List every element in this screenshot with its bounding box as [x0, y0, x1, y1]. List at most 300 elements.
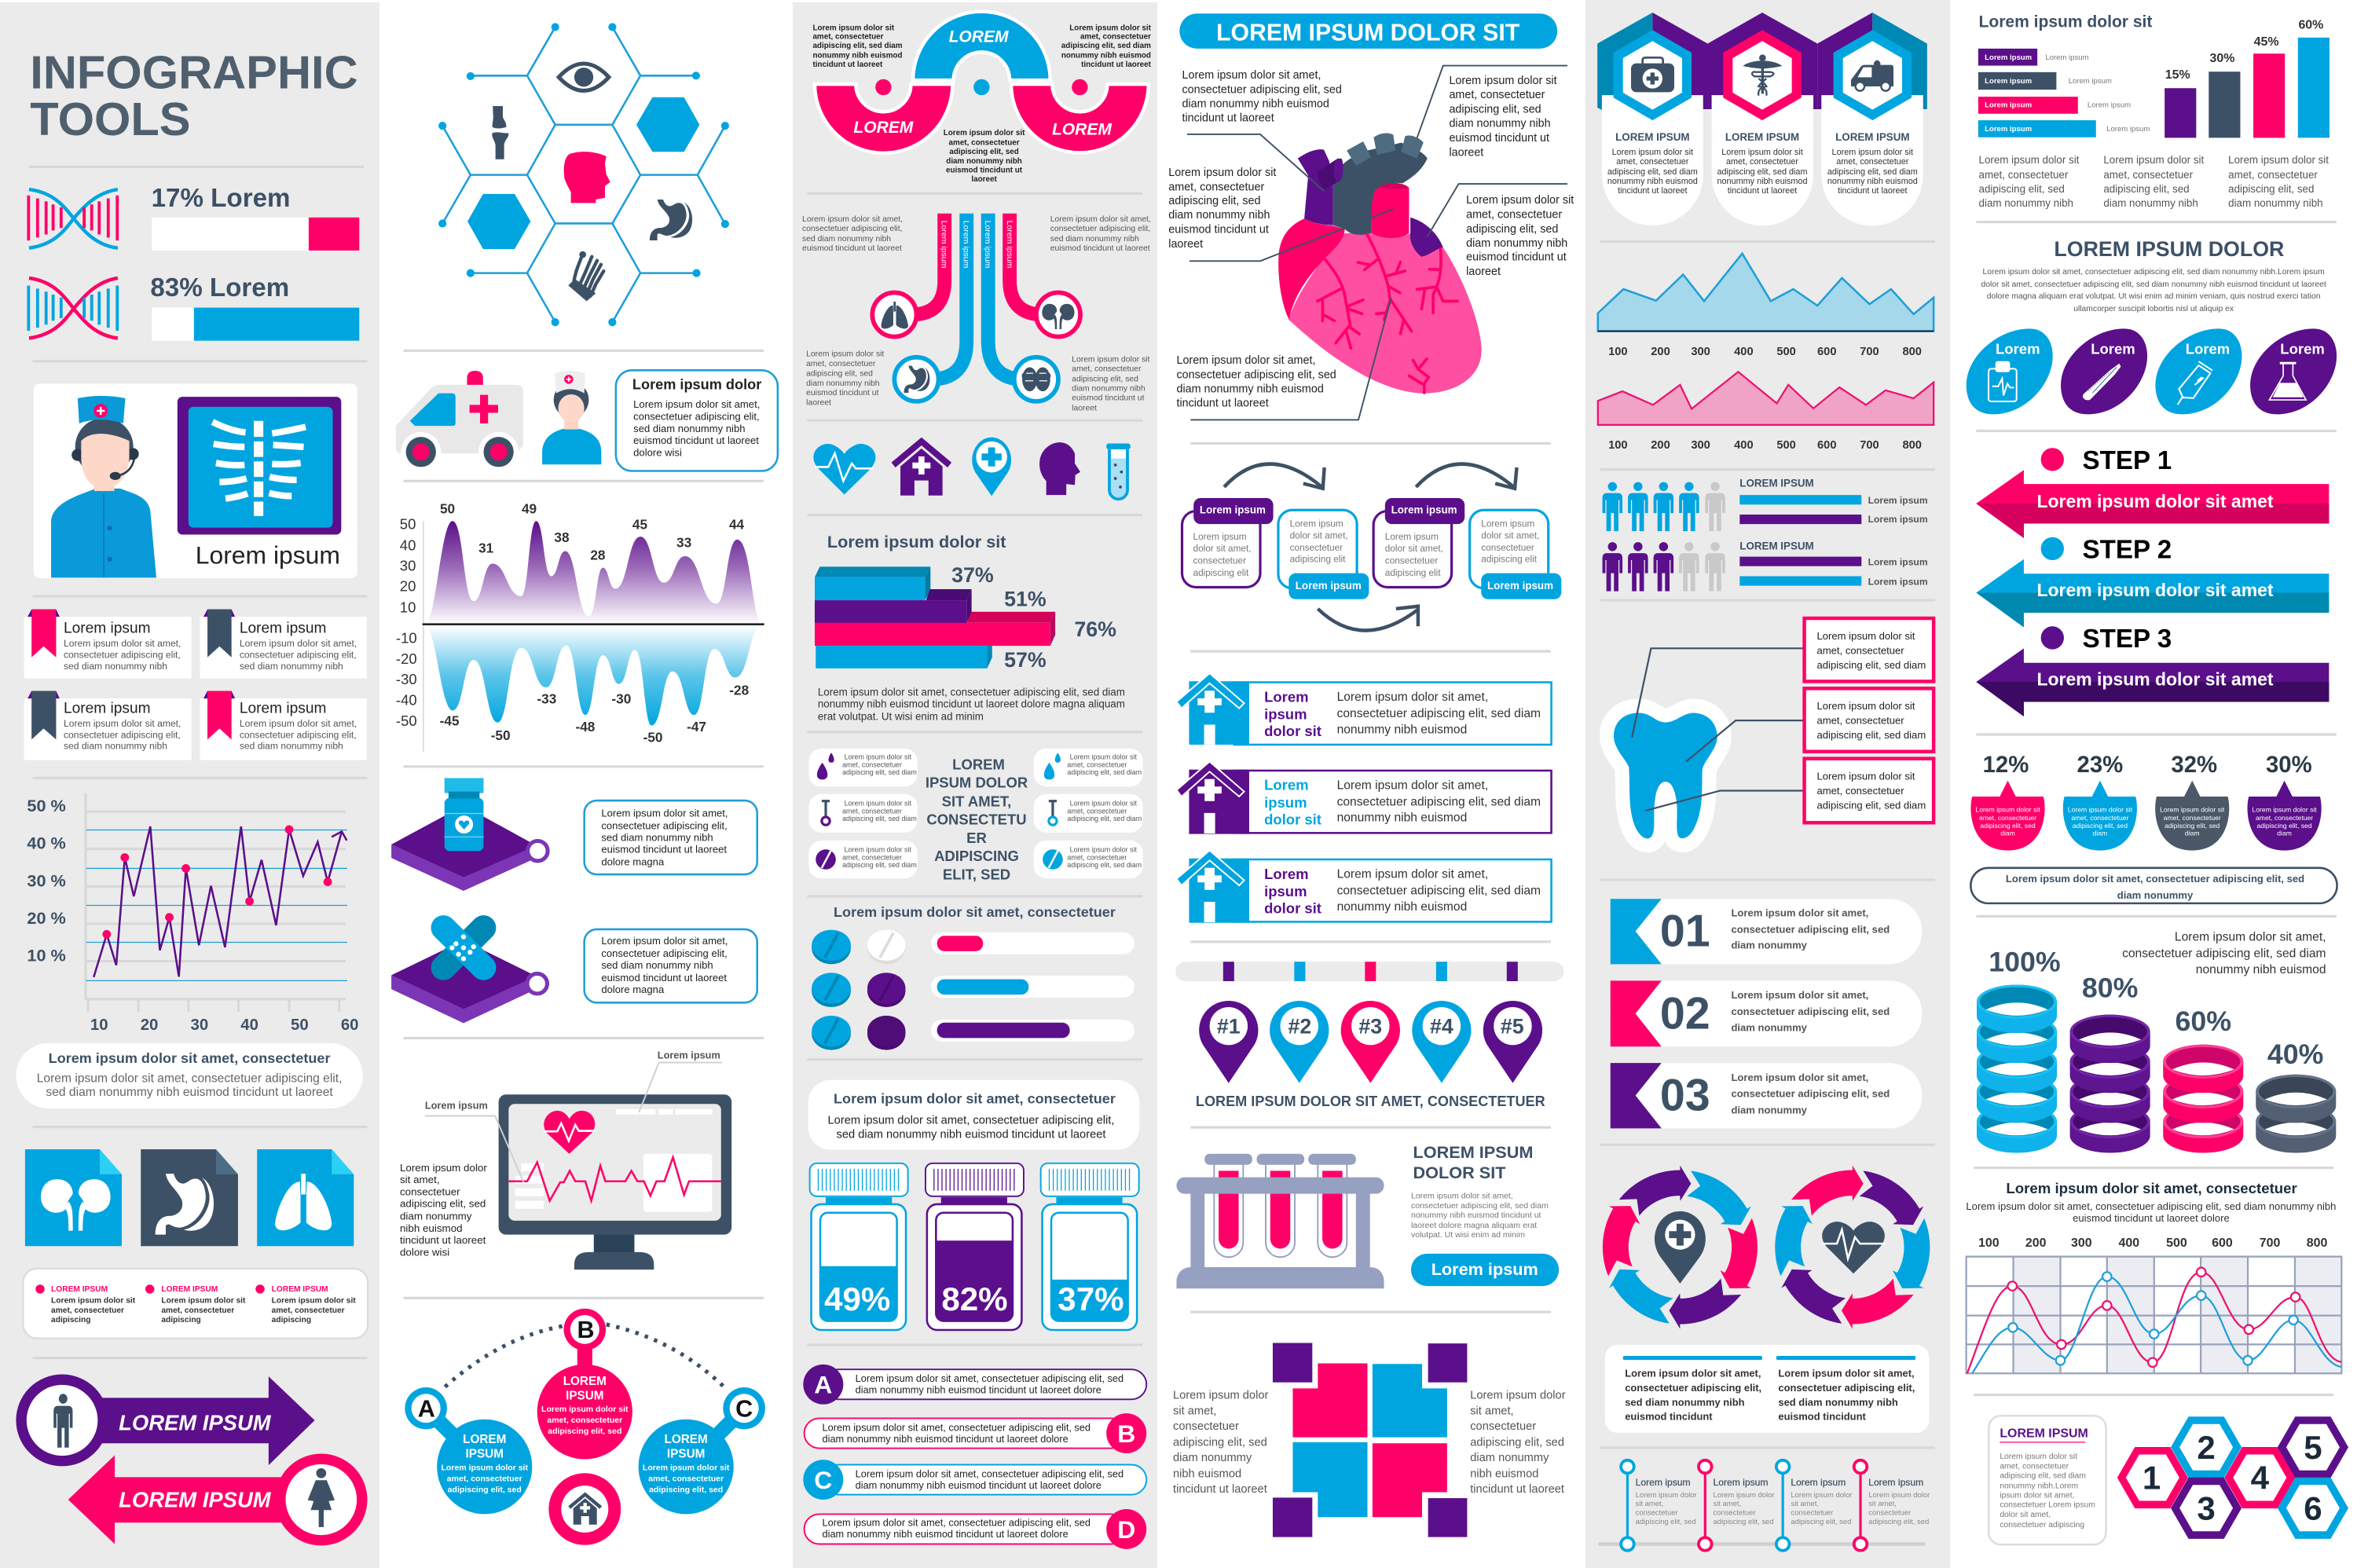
chart: mirrored area chart: 33 [676, 534, 691, 550]
chart: pink area: 500 [1776, 439, 1796, 452]
bar list and column chart: Lorem ipsum [2088, 101, 2131, 109]
chart: mirrored area chart: 10 [400, 599, 416, 615]
panel: column 5 background [1585, 0, 1950, 1568]
icon: paramedic [542, 371, 601, 464]
heart anatomy diagram: consectetuer adipiscing elit, sed [1182, 84, 1342, 97]
ribbon card 2: Lorem ipsum [240, 621, 326, 637]
white card with two text columns [1605, 1345, 1929, 1433]
numbered list 03: Lorem ipsum dolor sit amet, [1731, 1072, 1868, 1083]
chart: mirrored area chart: 31 [478, 540, 494, 555]
heart anatomy diagram: diam nonummy nibh euismod [1182, 97, 1329, 110]
puzzle squares diagram: Lorem ipsum dolor [1470, 1390, 1566, 1402]
ribbon card 3: Lorem ipsum [64, 701, 151, 717]
heart anatomy diagram: euismod tincidunt ut [1168, 224, 1269, 236]
diagram: A B C circles: amet, consectetuer [447, 1474, 522, 1483]
drop and pill pills with central heading: Lorem ipsum dolor sit [1070, 845, 1137, 853]
timeline with four items: sit amet, [1636, 1499, 1663, 1508]
drop and pill pills with central heading: adipiscing elit, sed diam [842, 768, 917, 776]
drop and pill pills with central heading: adipiscing elit, sed diam [1067, 861, 1142, 869]
drop and pill pills with central heading: amet, consectetuer [1067, 808, 1127, 815]
U-shaped three part diagram: Lorem ipsum dolor sit [812, 24, 895, 32]
white card with two text columns: consectetuer adipiscing elit, [1625, 1382, 1761, 1394]
numbered hexagons: 6 [2304, 1489, 2322, 1526]
text card: Lorem ipsum: consectetuer Lorem ipsum [2000, 1501, 2095, 1509]
puzzle squares diagram: sit amet, [1470, 1405, 1514, 1417]
numbered list 03 [1611, 1063, 1922, 1128]
diagram: A B C circles: amet, consectetuer [547, 1416, 622, 1425]
organ pipes diagram: amet, consectetuer [806, 360, 876, 368]
header pill: LOREM IPSUM DOLOR SIT [1216, 20, 1520, 46]
leaf shaped medical icons [1967, 328, 2337, 414]
chart: mirrored area chart: -45 [440, 713, 460, 729]
drop and pill pills with central heading: CONSECTETU [926, 811, 1027, 828]
hexagon badge cards: adipiscing elit, sed diam [1607, 167, 1698, 177]
chart: mirrored area chart: -10 [396, 629, 417, 646]
diagram: A B C circles: Lorem ipsum dolor sit [643, 1464, 730, 1472]
list item A: Lorem ipsum dolor sit amet, consectetuer adipiscing elit, sed [856, 1372, 1124, 1384]
icon: foot bones [568, 251, 603, 301]
text: monitor paragraph: tincidunt ut laoreet [400, 1234, 486, 1246]
bar list and column chart: Lorem ipsum [1985, 125, 2032, 134]
white card with two text columns: euismod tincidunt [1625, 1410, 1713, 1422]
list item C: Lorem ipsum dolor sit amet, consectetuer adipiscing elit, sed [856, 1467, 1124, 1479]
numbered list 03: diam nonummy [1731, 1104, 1808, 1116]
ribbon card 4: sed diam nonummy nibh [240, 741, 343, 752]
chart: blue area: 300 [1691, 346, 1710, 358]
location pins row: #4 [1430, 1015, 1453, 1039]
DNA statistic 83% [28, 273, 359, 341]
U-shaped three part diagram: euismod tincidunt ut [946, 166, 1023, 174]
drop and pill pills with central heading: amet, consectetuer [842, 761, 902, 768]
step 3 arrow [1976, 625, 2329, 716]
house banner 2: consectetuer adipiscing elit, sed diam [1337, 795, 1541, 808]
hexagon badge cards: nonummy nibh euismod [1607, 177, 1698, 186]
house banner 3 [1176, 851, 1552, 923]
drop and pill pills with central heading: ER [966, 830, 987, 846]
house banner 1: dolor sit [1264, 723, 1321, 739]
house banner 3: nonummy nibh euismod [1337, 900, 1467, 914]
chart: two-line grid chart: 200 [2025, 1236, 2047, 1250]
text box: Lorem ipsum dolor: dolore wisi [633, 446, 682, 458]
chart: blue area: 200 [1651, 346, 1670, 358]
chart: blue area: 600 [1817, 346, 1837, 358]
label: 83% Lorem: 83% Lorem [150, 273, 289, 302]
tooth diagram: adipiscing elit, sed diam [1817, 799, 1926, 811]
bar list and column chart: diam nonummy nibh [1979, 197, 2073, 209]
timeline with four items: adipiscing elit, sed [1791, 1517, 1851, 1526]
timeline with four items: Lorem ipsum [1791, 1477, 1846, 1488]
text card: Lorem ipsum [1989, 1416, 2106, 1544]
text box: bandage: consectetuer adipiscing elit, [601, 947, 728, 959]
organ pipes diagram: amet, consectetuer [1072, 365, 1142, 374]
bottle 82%: 82% [941, 1280, 1008, 1317]
leaf shaped medical icons: Lorem [1996, 340, 2040, 357]
text: test tube section: LOREM IPSUM [1413, 1142, 1533, 1162]
leaf shaped medical icons: Lorem [2280, 340, 2325, 357]
heart anatomy diagram: amet, consectetuer [1466, 208, 1562, 221]
white card with two text columns: euismod tincidunt [1778, 1410, 1866, 1422]
bar list and column chart: amet, consectetuer [1979, 169, 2069, 181]
chart: pink area: 100 [1608, 439, 1628, 452]
house banner 3: ipsum [1264, 883, 1307, 899]
icon: ambulance [396, 371, 523, 472]
text: monitor paragraph: nibh euismod [400, 1222, 463, 1234]
people pictogram statistics: Lorem ipsum [1868, 514, 1928, 525]
U-shaped three part diagram: tincidunt ut laoreet [812, 60, 883, 69]
organ pipes diagram: sed diam nonummy nibh [802, 235, 891, 244]
text: test tube section: consectetuer adipiscing elit, sed diam [1411, 1201, 1549, 1211]
organ pipes diagram: diam nonummy nibh [806, 379, 880, 388]
organ pipes diagram: euismod tincidunt ut laoreet [802, 244, 902, 253]
numbered hexagons: 5 [2304, 1429, 2322, 1466]
text: monitor paragraph: diam nonummy [400, 1211, 472, 1222]
text: monitor paragraph: dolore wisi [400, 1246, 449, 1258]
chart: mirrored area chart: -33 [537, 691, 556, 706]
diagram: A B C circles: amet, consectetuer [648, 1474, 724, 1483]
percent drops row: amet, consectetuer [1979, 814, 2036, 822]
U-shaped three part diagram: LOREM [853, 119, 914, 137]
list item A: diam nonummy nibh euismod tincidunt ut laoreet dolore [856, 1384, 1102, 1396]
house banner 2: Lorem ipsum dolor sit amet, [1337, 779, 1488, 792]
chart: mirrored area chart: 50 [400, 516, 416, 533]
ribbon card 3: consectetuer adipiscing elit, [64, 729, 181, 740]
numbered list 02: Lorem ipsum dolor sit amet, [1731, 989, 1868, 1001]
diagram: A B C circles: LOREM [665, 1433, 708, 1446]
heart anatomy diagram: tincidunt ut laoreet [1176, 397, 1269, 409]
panel: doctor and x-ray card [34, 384, 357, 578]
diagram: A B C circles: IPSUM [667, 1448, 705, 1461]
process cycle with cards and arrows: consectetuer [1481, 543, 1534, 553]
icon row: heart, house, pin, head, test tube [813, 438, 1131, 499]
chart: two-line grid chart: euismod tincidunt ut laoreet dolore [2073, 1212, 2230, 1224]
legend box: three lorem items: LOREM IPSUM [51, 1285, 108, 1294]
list item D: Lorem ipsum dolor sit amet, consectetuer adipiscing elit, sed [823, 1517, 1091, 1529]
chart: pink area: 600 [1817, 439, 1837, 452]
white card with two text columns: sed diam nonummy nibh [1778, 1397, 1898, 1409]
percent drops row [1970, 781, 2322, 851]
hexagon badge cards: tincidunt ut laoreet [1728, 186, 1797, 196]
drop and pill pills with central heading: adipiscing elit, sed diam [1067, 815, 1142, 822]
hexagon badge cards: LOREM IPSUM [1615, 131, 1690, 143]
timeline with four items: adipiscing elit, sed [1713, 1517, 1774, 1526]
process cycle with cards and arrows [1182, 464, 1561, 631]
leaf shaped medical icons: Lorem [2186, 340, 2230, 357]
diagram: A B C circles: Lorem ipsum dolor sit [442, 1464, 528, 1472]
timeline with four items: Lorem ipsum [1868, 1477, 1923, 1488]
bottle 49%: 49% [824, 1280, 890, 1317]
bottle 37% [1041, 1163, 1139, 1330]
people pictogram statistics: Lorem ipsum [1868, 495, 1928, 506]
diagram: A B C circles: LOREM [563, 1375, 607, 1388]
numbered hexagons: 2 [2197, 1429, 2216, 1466]
percent drops row: amet, consectetuer [2164, 814, 2221, 822]
callout pill: sed diam nonummy nibh euismod tincidunt ut laoreet [837, 1128, 1105, 1141]
DNA statistic 17% [28, 184, 359, 251]
chart: mirrored area chart: -28 [729, 683, 750, 698]
ribbon card 4: consectetuer adipiscing elit, [240, 729, 357, 740]
circular arrows with pin [1596, 1162, 1764, 1332]
title: INFOGRAPHIC [30, 46, 358, 98]
chart: two-line grid chart: 300 [2071, 1236, 2092, 1250]
percent drops row: diam [2277, 830, 2292, 837]
list item D: D [1117, 1515, 1135, 1544]
heart anatomy diagram: Lorem ipsum dolor sit [1466, 194, 1574, 207]
text: monitor paragraph: adipiscing elit, sed [400, 1198, 486, 1210]
heart anatomy diagram: diam nonummy nibh euismod [1176, 383, 1324, 395]
legend box: three lorem items: Lorem ipsum dolor sit [51, 1297, 136, 1306]
text card: Lorem ipsum: dolor sit amet, [2000, 1511, 2051, 1519]
U-shaped three part diagram: diam nonummy nibh [946, 157, 1022, 166]
legend box: three lorem items: adipiscing [272, 1316, 311, 1324]
percent drops row: amet, consectetuer [2256, 814, 2313, 822]
ribbon card 1: consectetuer adipiscing elit, [64, 649, 181, 660]
bar list and column chart: Lorem ipsum [1985, 101, 2032, 109]
process cycle with cards and arrows: consectetuer [1385, 556, 1438, 566]
text: test tube section: nonummy nibh euismod tincidunt ut [1411, 1211, 1541, 1220]
chart: mirrored area chart: -30 [396, 671, 417, 687]
numbered hexagons: 1 [2143, 1460, 2161, 1497]
numbered hexagons [2121, 1420, 2344, 1535]
icons: drops [817, 753, 1061, 779]
hexagon anatomy diagram [438, 23, 729, 326]
puzzle squares diagram [1173, 1343, 1566, 1537]
house banner 2 [1176, 762, 1552, 834]
ribbon card 2: Lorem ipsum dolor sit amet, [240, 638, 357, 649]
puzzle squares diagram: nibh euismod [1470, 1467, 1538, 1480]
puzzle squares diagram: consectetuer [1470, 1420, 1536, 1433]
list item B: Lorem ipsum dolor sit amet, consectetuer adipiscing elit, sed [823, 1421, 1091, 1433]
chart: two-line grid chart: Lorem ipsum dolor sit amet, consectetuer adipiscing elit, sed diam nonummy nibh [1966, 1200, 2336, 1212]
list item A [803, 1365, 1146, 1405]
process cycle with cards and arrows: adipiscing elit [1290, 555, 1346, 565]
drop and pill pills with central heading: Lorem ipsum dolor sit [845, 799, 911, 807]
process cycle with cards and arrows: adipiscing elit [1481, 555, 1538, 565]
location pins row [1175, 962, 1564, 1109]
pill progress section: Lorem ipsum dolor sit amet, consectetuer [834, 904, 1116, 920]
icon: brain [1021, 368, 1050, 391]
organ pipes diagram: Lorem ipsum [939, 221, 948, 269]
step 3 arrow: STEP 3 [2083, 625, 2172, 654]
house banner 3: consectetuer adipiscing elit, sed diam [1337, 885, 1541, 897]
U-shaped three part diagram: adipiscing elit, sed [949, 148, 1019, 156]
percent drops row: diam [2000, 830, 2015, 837]
bar list and column chart: diam nonummy nibh [2103, 197, 2198, 209]
icon: flask [2269, 362, 2306, 400]
heart anatomy diagram: Lorem ipsum dolor sit [1449, 75, 1557, 87]
process cycle with cards and arrows: dolor sit amet, [1290, 531, 1348, 541]
ribbon card 3 [24, 691, 192, 760]
legend box: three lorem items [23, 1269, 368, 1339]
ribbon card 3: Lorem ipsum dolor sit amet, [64, 718, 181, 729]
process cycle with cards and arrows: Lorem ipsum [1200, 504, 1266, 516]
chart: percentage line chart [27, 793, 359, 1034]
hexagon badge cards: amet, consectetuer [1726, 157, 1798, 167]
legend box: three lorem items: LOREM IPSUM [161, 1285, 218, 1294]
text box: bottle: dolore magna [601, 856, 665, 868]
timeline with four items: Lorem ipsum dolor [1791, 1490, 1852, 1499]
timeline with four items: consectetuer [1791, 1508, 1833, 1517]
heart illustration [1278, 133, 1482, 394]
icon: head [564, 152, 610, 203]
drop and pill pills with central heading: amet, consectetuer [842, 808, 902, 815]
step 2 arrow [1976, 536, 2329, 628]
percentage labels: 30% [2266, 752, 2312, 778]
chart: blue area: 400 [1734, 346, 1754, 358]
text card: Lorem ipsum: amet, consectetuer [2000, 1463, 2069, 1471]
ribbon card 2: sed diam nonummy nibh [240, 661, 343, 672]
drop and pill pills with central heading: adipiscing elit, sed diam [842, 861, 917, 869]
caption: Lorem ipsum: Lorem ipsum [196, 541, 340, 570]
heart anatomy diagram: amet, consectetuer [1168, 181, 1264, 193]
chart: two-line grid chart: 100 [1978, 1236, 2000, 1250]
diagram: A B C circles: A [418, 1396, 435, 1423]
heart anatomy diagram: adipiscing elit, sed [1168, 195, 1261, 207]
chart: mirrored area chart: -30 [611, 691, 631, 706]
arrow: purple male [16, 1375, 315, 1466]
monitor with ECG [425, 1049, 731, 1269]
chart: pink area: 300 [1691, 439, 1710, 452]
icon: DNA pink blue [28, 278, 118, 339]
diagram: A B C circles: IPSUM [566, 1389, 604, 1402]
process cycle with cards and arrows: consectetuer [1290, 543, 1343, 553]
icon: ambulance [1851, 60, 1893, 91]
icon: x-ray monitor [178, 397, 341, 535]
hexagon badge cards: Lorem ipsum dolor sit [1832, 148, 1913, 157]
drop and pill pills with central heading: Lorem ipsum dolor sit [1070, 753, 1137, 760]
chart: 3D horizontal bars [815, 532, 1125, 723]
numbered list 02 [1611, 980, 1922, 1046]
chart: blue area [1598, 254, 1934, 358]
text box: bandage: euismod tincidunt ut laoreet [601, 972, 727, 984]
U-shaped three part diagram: nonummy nibh euismod [812, 51, 903, 60]
ribbon card 1 [24, 610, 192, 679]
text box: bandage: Lorem ipsum dolor sit amet, [601, 935, 728, 947]
process cycle with cards and arrows: consectetuer [1193, 556, 1246, 566]
arrow: purple male: LOREM IPSUM [119, 1411, 272, 1435]
tooth diagram: amet, consectetuer [1817, 785, 1904, 797]
percentage labels: 12% [1983, 752, 2029, 778]
U-shaped three part diagram: amet, consectetuer [1080, 33, 1151, 42]
percent drops row: Lorem ipsum dolor sit [2253, 806, 2317, 814]
text: monitor paragraph: Lorem ipsum dolor [400, 1162, 487, 1174]
monitor with ECG: Lorem ipsum [658, 1049, 720, 1061]
leaf shaped medical icons: Lorem [2091, 340, 2135, 357]
monitor with ECG: Lorem ipsum [425, 1100, 488, 1112]
bar list and column chart: adipiscing elit, sed [2103, 183, 2190, 195]
organ pipes diagram: laoreet [1072, 404, 1097, 412]
organ pipes diagram: consectetuer adipiscing elit, [802, 225, 903, 233]
puzzle squares diagram: tincidunt ut laoreet [1173, 1483, 1267, 1496]
drop and pill pills with central heading: Lorem ipsum dolor sit [845, 845, 911, 853]
text card: Lorem ipsum: LOREM IPSUM [2000, 1427, 2088, 1441]
timeline with four items: Lorem ipsum [1636, 1477, 1691, 1488]
white card with two text columns: Lorem ipsum dolor sit amet, [1625, 1368, 1761, 1379]
organ pipes diagram: Lorem ipsum dolor sit amet, [802, 215, 903, 224]
chart: pink area: 400 [1734, 439, 1754, 452]
chart: 3D horizontal bars: 76% [1074, 617, 1116, 641]
diagram: A B C circles: adipiscing elit, sed [448, 1485, 522, 1494]
timeline with four items: adipiscing elit, sed [1868, 1517, 1929, 1526]
timeline with four items: Lorem ipsum dolor [1868, 1490, 1930, 1499]
numbered list 01: diam nonummy [1731, 940, 1808, 951]
title [30, 46, 358, 145]
list item B: diam nonummy nibh euismod tincidunt ut laoreet dolore [823, 1433, 1069, 1445]
ring stack chart: 80% [2082, 972, 2138, 1003]
drop and pill pills with central heading: ELIT, SED [943, 866, 1010, 882]
diagram: A B C circles: Lorem ipsum dolor sit [541, 1405, 629, 1414]
house banner 1: consectetuer adipiscing elit, sed diam [1337, 707, 1541, 720]
hexagon badge cards: amet, consectetuer [1616, 157, 1689, 167]
process cycle with cards and arrows: adipiscing elit [1193, 568, 1249, 578]
heading and paragraph: Lorem ipsum dolor: Lorem ipsum dolor sit amet, consectetuer adipiscing elit, sed diam nonummy nibh.Lorem ipsum [1983, 268, 2325, 277]
people pictogram statistics: Lorem ipsum [1868, 576, 1928, 587]
bar list and column chart: adipiscing elit, sed [2228, 183, 2314, 195]
text box: Lorem ipsum dolor: euismod tincidunt ut laoreet [633, 434, 759, 446]
icon: medical bag [1631, 57, 1674, 92]
ribbon card 2: consectetuer adipiscing elit, [240, 649, 357, 660]
ribbon card 4: Lorem ipsum [240, 701, 326, 717]
diagram: A B C circles: adipiscing elit, sed [548, 1427, 621, 1436]
chart: mirrored area chart: 40 [400, 537, 416, 553]
tooth diagram: amet, consectetuer [1817, 715, 1904, 727]
heart anatomy diagram: diam nonummy nibh [1168, 209, 1270, 222]
pill progress section [812, 904, 1135, 1050]
icons: thermometers [822, 801, 1057, 825]
numbered hexagons: 4 [2251, 1460, 2270, 1497]
drop and pill pills with central heading: amet, consectetuer [1067, 854, 1127, 862]
U-shaped three part diagram: nonummy nibh euismod [1061, 51, 1151, 60]
heart anatomy diagram: diam nonummy nibh [1449, 117, 1551, 130]
process cycle with cards and arrows: Lorem ipsum [1385, 532, 1439, 542]
chart: mirrored area chart: 49 [522, 501, 537, 517]
chart: mirrored area chart: -50 [396, 713, 417, 729]
ring stack chart: 40% [2267, 1039, 2323, 1070]
circular arrows with heart [1769, 1162, 1936, 1332]
hexagon badge cards: LOREM IPSUM [1725, 131, 1799, 143]
heart anatomy diagram: diam nonummy nibh [1466, 237, 1567, 250]
bar list and column chart: Lorem ipsum [2045, 53, 2089, 62]
house banner 2: dolor sit [1264, 811, 1321, 828]
ring stack chart [1977, 931, 2336, 1153]
heart anatomy diagram: euismod tincidunt ut [1466, 251, 1567, 264]
heart anatomy diagram: consectetuer adipiscing elit, sed [1176, 369, 1336, 382]
step 1 arrow: Lorem ipsum dolor sit amet [2037, 491, 2274, 511]
text: test tube section: Lorem ipsum [1431, 1259, 1538, 1279]
chart: mirrored area chart: 45 [632, 517, 647, 533]
process cycle with cards and arrows: Lorem ipsum [1487, 580, 1553, 592]
bar list and column chart: Lorem ipsum [1985, 77, 2032, 86]
U-shaped three part diagram: Lorem ipsum dolor sit [1069, 24, 1152, 32]
heart anatomy diagram: laoreet [1168, 238, 1203, 251]
drop and pill pills with central heading: amet, consectetuer [842, 854, 902, 862]
chart: mirrored area chart: -48 [576, 719, 596, 735]
text box: bottle: sed diam nonummy nibh [601, 832, 713, 844]
chart: mirrored area chart: -47 [687, 719, 706, 735]
icon: syringe [2178, 361, 2212, 405]
legend box: three lorem items: adipiscing [51, 1316, 90, 1324]
bar list and column chart: Lorem ipsum dolor sit [1979, 13, 2152, 31]
house banner 1: ipsum [1264, 706, 1307, 723]
text box: Lorem ipsum dolor: sed diam nonummy nibh [633, 423, 745, 434]
puzzle squares diagram: sit amet, [1173, 1405, 1216, 1417]
heart anatomy diagram: laoreet [1449, 146, 1483, 159]
heart anatomy diagram: adipiscing elit, sed [1466, 223, 1558, 236]
icon: clipboard [1989, 362, 2017, 401]
legend box: three lorem items: Lorem ipsum dolor sit [161, 1297, 246, 1306]
chart: pink area: 200 [1651, 439, 1670, 452]
progress bar 83% [152, 308, 359, 341]
bar list and column chart: 15% [2165, 68, 2190, 82]
